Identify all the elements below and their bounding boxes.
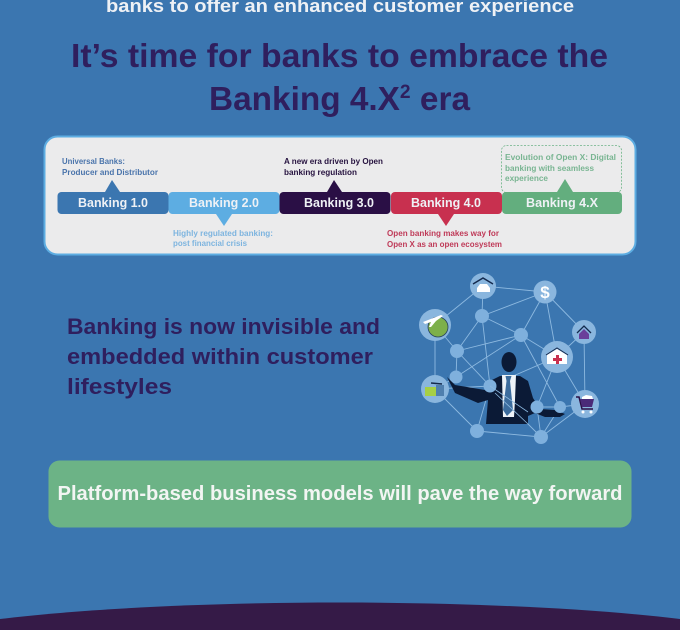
- Banking 1.0 stage: Producer and Distributor: [62, 167, 159, 177]
- Banking 4.X stage: experience: [505, 173, 548, 183]
- Banking 3.0 stage: [280, 156, 390, 214]
- Banking 1.0 stage: Universal Banks:: [62, 156, 125, 166]
- Banking 4.0 stage: Open X as an open ecosystem: [387, 239, 502, 249]
- icon: car: [470, 273, 496, 299]
- Banking 4.0 stage: [387, 192, 502, 249]
- network nodes: [450, 309, 548, 444]
- icon: dollar: [534, 280, 556, 304]
- icon: wallet: [421, 375, 449, 403]
- Banking 3.0 stage: banking regulation: [284, 167, 357, 177]
- panel: banking timeline: [44, 136, 636, 254]
- icon: medical house: [541, 341, 573, 373]
- green banner: Platform-based business models will pave the way forward: [58, 482, 622, 505]
- Banking 3.0 stage: A new era driven by Open: [284, 156, 383, 166]
- network illustration: [419, 273, 599, 444]
- footer curve: [0, 602, 680, 630]
- lifestyle statement: lifestyles: [67, 374, 172, 399]
- title: Banking 4.X: [209, 80, 398, 117]
- Banking 2.0 stage: post financial crisis: [173, 238, 247, 248]
- businessman silhouette: [447, 352, 566, 424]
- Banking 3.0 stage: Banking 3.0: [304, 196, 374, 210]
- icon: plane and globe: [419, 309, 451, 341]
- title: era: [411, 80, 471, 117]
- Banking 2.0 stage: Highly regulated banking:: [173, 228, 273, 238]
- icon: shopping cart: [571, 390, 599, 418]
- Banking 4.0 stage: Banking 4.0: [411, 196, 481, 210]
- Banking 1.0 stage: Banking 1.0: [78, 196, 148, 210]
- Banking 4.X stage: Banking 4.X: [526, 196, 599, 210]
- Banking 2.0 stage: Banking 2.0: [189, 196, 259, 210]
- icon: house: [572, 320, 596, 344]
- Banking 4.X stage: [502, 146, 622, 214]
- lifestyle statement: [67, 314, 380, 399]
- Banking 1.0 stage: [58, 156, 168, 214]
- green banner: [48, 460, 632, 528]
- Banking 4.X stage: banking with seamless: [505, 163, 594, 173]
- title: [71, 37, 608, 117]
- Banking 4.0 stage: Open banking makes way for: [387, 228, 500, 238]
- Banking 4.X stage: Evolution of Open X: Digital: [505, 152, 616, 162]
- title: It’s time for banks to embrace the: [71, 37, 608, 74]
- network links: [435, 286, 585, 437]
- Banking 2.0 stage: [168, 192, 280, 248]
- icon: dollar: $: [540, 283, 550, 302]
- title: 2: [400, 82, 411, 103]
- lifestyle statement: embedded within customer: [67, 344, 373, 369]
- lifestyle statement: Banking is now invisible and: [67, 314, 380, 339]
